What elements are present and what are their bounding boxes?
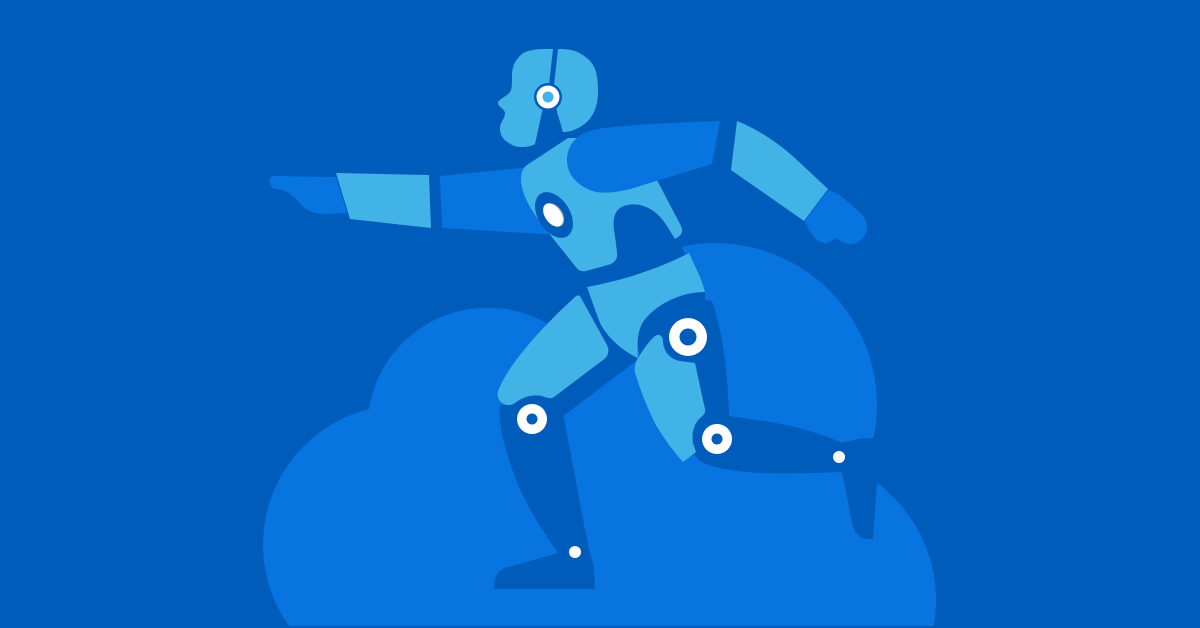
back ankle joint: [833, 451, 845, 463]
torso: [521, 138, 682, 271]
front thigh: [498, 295, 608, 405]
pelvis: [587, 253, 705, 358]
back thigh: [635, 335, 705, 462]
left arm upper: [440, 167, 560, 235]
robot: [270, 49, 877, 589]
front ankle joint: [569, 546, 581, 558]
right forearm: [731, 121, 828, 221]
cloud: [263, 243, 936, 626]
waist gap: [570, 200, 690, 292]
left forearm: [336, 173, 431, 228]
back leg dark hip: [636, 290, 729, 440]
front knee joint: [517, 404, 547, 434]
back calf and foot: [692, 414, 877, 539]
left hand pointing: [270, 176, 347, 214]
hip joint: [669, 318, 707, 356]
chest port: [527, 185, 581, 245]
ear joint: [534, 83, 562, 111]
right upper arm: [567, 121, 720, 193]
hip and front knee dark connector: [500, 284, 640, 420]
back knee joint: [702, 424, 732, 454]
front shin and shoe: [494, 405, 595, 589]
head back: [554, 49, 598, 132]
right hand: [805, 190, 867, 244]
head front: [498, 49, 553, 147]
